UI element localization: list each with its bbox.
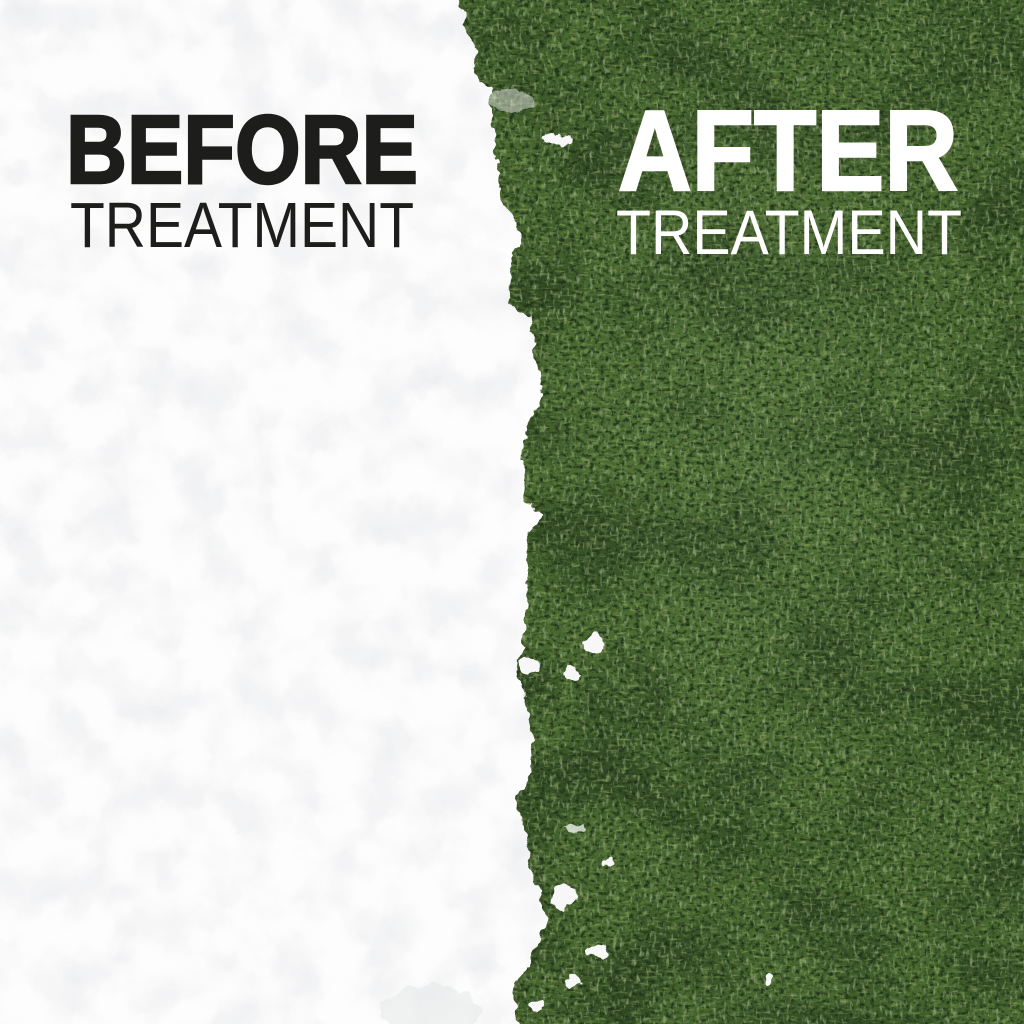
panel: snow before treatment: [0, 0, 580, 1024]
subtitle: treatment: TREATMENT: [70, 189, 414, 261]
subtitle: treatment: TREATMENT: [616, 198, 962, 268]
panel: grass after treatment: [440, 0, 1024, 1024]
heading: before treatment: [66, 95, 418, 261]
title: before: BEFORE: [66, 95, 418, 204]
snow clumps on the grass: [488, 88, 772, 1012]
title: after: AFTER: [618, 88, 958, 215]
heading: after treatment: [616, 88, 962, 268]
